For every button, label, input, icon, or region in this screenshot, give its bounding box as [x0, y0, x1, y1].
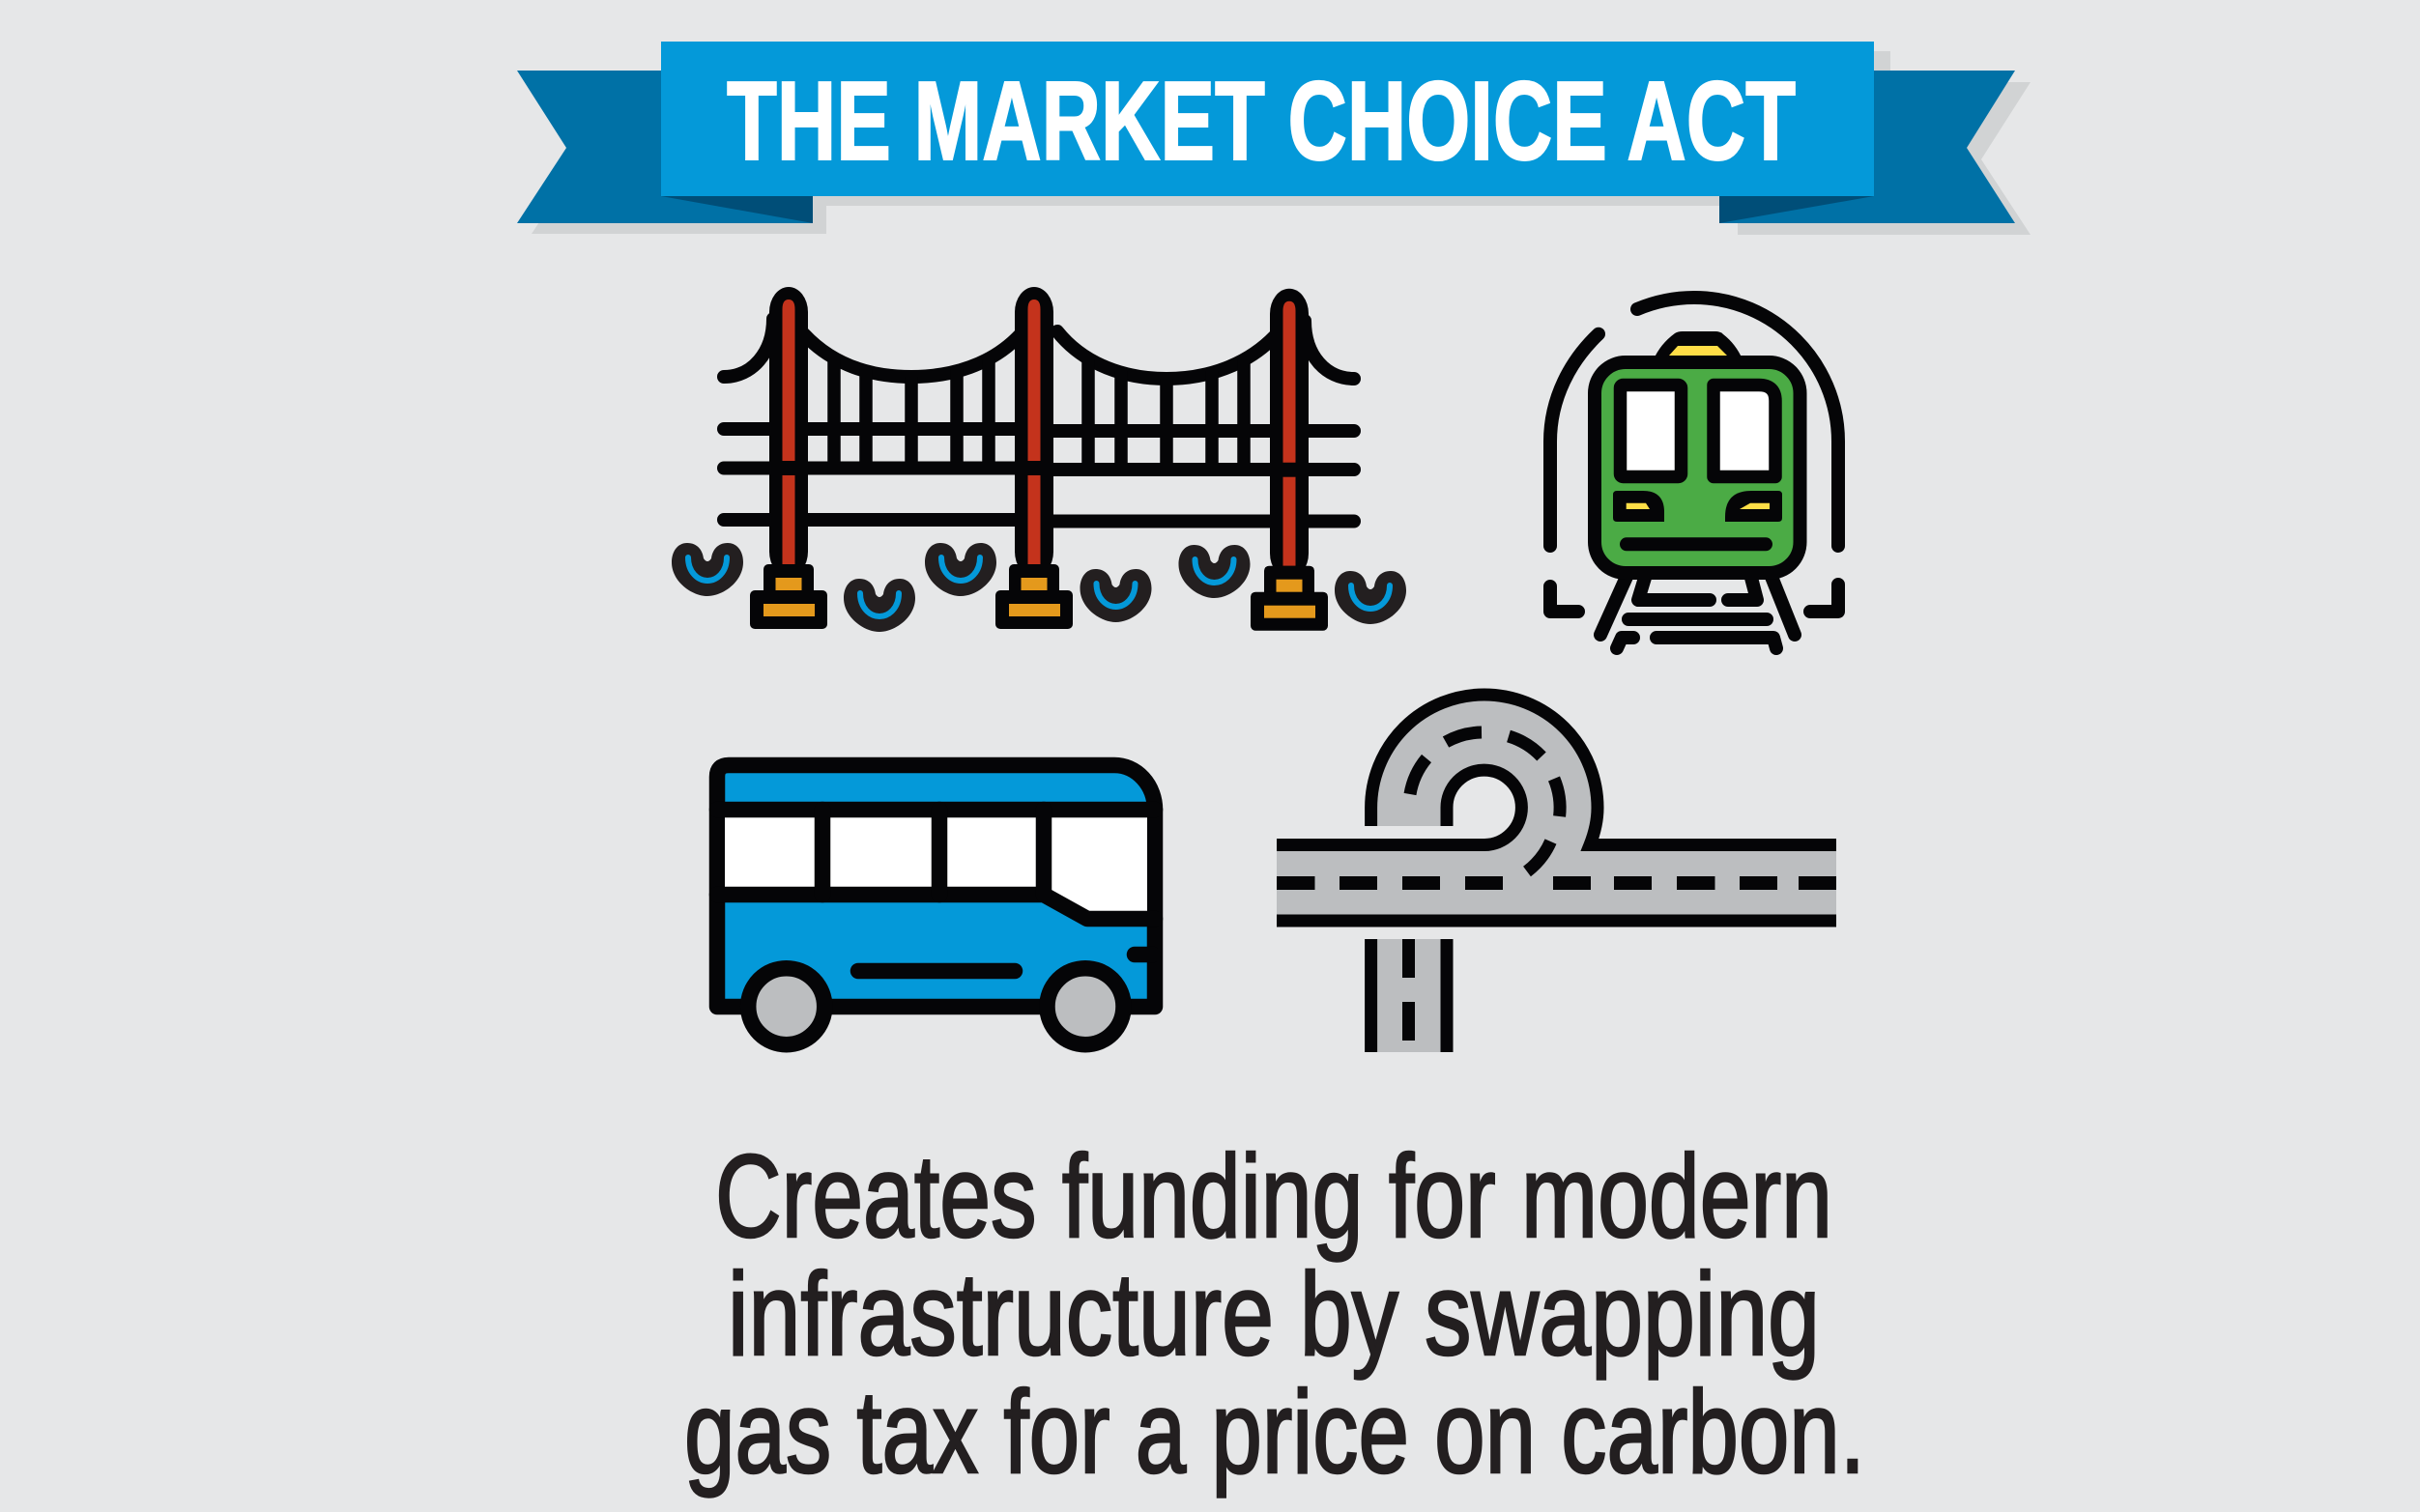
train left headlight [1613, 491, 1664, 522]
road centre dashes [1277, 876, 1836, 1041]
water waves [672, 543, 1406, 632]
bridge cables [724, 319, 1354, 379]
bridge deck lines [724, 429, 1354, 522]
icon: road with loop ramp [1277, 695, 1836, 1052]
banner title: THE MARKET CHOICE ACT [727, 58, 1796, 184]
train left window [1620, 385, 1682, 477]
bus front wheel [748, 968, 824, 1044]
description line 1: Creates funding for modern [715, 1130, 1832, 1262]
train front bar [1627, 537, 1766, 551]
bus body [717, 765, 1155, 1007]
loop ramp dashes [1410, 732, 1560, 871]
banner face [661, 42, 1874, 196]
icon: suspension bridge [672, 287, 1406, 632]
bridge tower right [1251, 289, 1328, 631]
train tracks [1600, 577, 1795, 648]
description text [684, 1130, 1865, 1498]
title banner [517, 42, 2031, 235]
road edge lines [1277, 695, 1836, 1052]
train right headlight [1725, 491, 1782, 522]
bus windows [725, 810, 1147, 919]
bridge tower middle [995, 287, 1073, 629]
right ribbon fold [1719, 196, 1874, 223]
description line 3: gas tax for a price on carbon. [684, 1366, 1865, 1498]
tunnel arch and corners [1550, 298, 1838, 612]
train body [1595, 362, 1800, 573]
left ribbon tail [517, 71, 813, 223]
left ribbon fold [661, 196, 813, 223]
banner shadow [532, 51, 2031, 235]
right ribbon tail [1719, 71, 2015, 223]
train right window [1714, 385, 1775, 477]
icon: bus [717, 765, 1155, 1044]
bridge hangers [834, 359, 1244, 470]
bridge tower left [750, 287, 827, 629]
road surface [1277, 695, 1836, 1052]
train roof lamp [1654, 331, 1743, 359]
bus rear wheel [1048, 968, 1123, 1044]
bus frame lines [717, 810, 1155, 971]
description line 2: infrastructure by swapping [728, 1248, 1820, 1380]
icon: subway train in tunnel [1550, 298, 1838, 648]
